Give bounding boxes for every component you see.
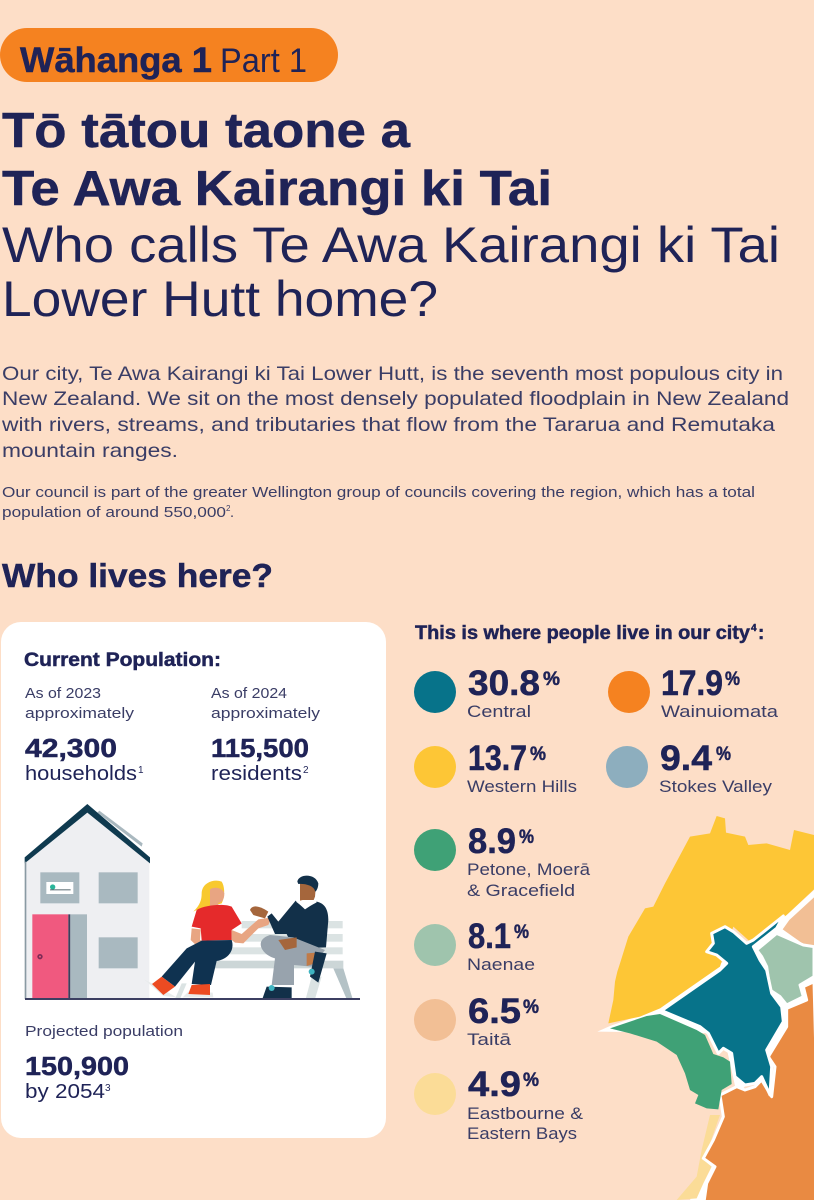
legend: Taitā: 6.5: [468, 992, 521, 1031]
legend: Petone, Moerā and Gracefield: Petone, Moerā: [467, 860, 591, 879]
stat: residents: [211, 686, 321, 785]
map area: Petone, Moerā and Gracefield: [610, 1014, 732, 1109]
stat: projected population: 150,900: [25, 1051, 129, 1081]
title: Te Awa Kairangi ki Tai: [2, 162, 552, 216]
legend: Taitā: [414, 992, 539, 1049]
legend: Western Hills: Western Hills: [467, 777, 577, 796]
intro paragraph: mountain ranges.: [2, 440, 178, 462]
legend: Eastbourne and Eastern Bays: Eastern Bays: [467, 1124, 577, 1143]
council paragraph: [2, 485, 755, 521]
council paragraph: population of around 550,000: [2, 505, 226, 521]
heading: current population: Current Population:: [24, 650, 221, 671]
legend: Central: Central: [467, 702, 531, 721]
stat: households: households: [25, 763, 137, 785]
icon: man in navy jumper: [250, 876, 328, 999]
legend: Naenae: 8.1: [468, 917, 511, 956]
legend: Stokes Valley: %: [716, 744, 731, 765]
legend: Eastbourne and Eastern Bays: %: [523, 1070, 539, 1091]
legend: Central: [414, 664, 560, 721]
map area: Central: [662, 916, 783, 1095]
stat: residents: 115,500: [211, 733, 309, 763]
icon: woman in red shirt: [144, 881, 272, 997]
title: [2, 104, 780, 327]
legend: Petone, Moerā and Gracefield: [414, 822, 591, 900]
legend: Western Hills: 13.7: [468, 739, 527, 778]
legend: Stokes Valley: 9.4: [660, 739, 713, 778]
legend: Eastbourne and Eastern Bays: [414, 1065, 584, 1143]
stat: residents: residents: [211, 763, 302, 785]
stat: residents: 2: [303, 765, 309, 776]
illustration: house and two people on a bench: [25, 804, 360, 1000]
legend: Eastbourne and Eastern Bays: 4.9: [468, 1065, 521, 1104]
map area: Western Hills: [608, 816, 814, 1023]
stat: projected population: by 2054: [25, 1081, 105, 1103]
legend: Stokes Valley: [606, 739, 773, 796]
stat: households: 42,300: [25, 733, 117, 763]
intro paragraph: with rivers, streams, and tributaries that flow from the Tararua and Remutaka: [1, 414, 775, 436]
legend: Central: 30.8: [468, 664, 540, 703]
legend: Petone, Moerā and Gracefield: 8.9: [468, 822, 516, 861]
legend: Petone, Moerā and Gracefield: & Gracefield: [467, 881, 575, 900]
map area: Eastbourne and Eastern Bays: [677, 1115, 720, 1200]
map area: Wainuiomata: [703, 982, 814, 1200]
icon: house: [25, 804, 150, 999]
map of Lower Hutt suburbs: [597, 816, 814, 1200]
heading: where people live: :: [758, 623, 764, 644]
map area: Taitā: [783, 897, 814, 946]
panel: population card: [1, 622, 386, 1138]
stat: residents: As of 2024: [211, 686, 287, 702]
stat: households: 1: [138, 765, 144, 776]
intro paragraph: [1, 363, 789, 462]
stat: households: As of 2023: [25, 686, 101, 702]
stat: projected population: [25, 1023, 183, 1103]
legend: Wainuiomata: %: [725, 669, 740, 690]
stat: projected population: Projected population: [25, 1023, 183, 1040]
legend: Taitā: %: [523, 997, 539, 1018]
stat: residents: approximately: [211, 706, 321, 722]
section tag pill: Part 1: [220, 42, 307, 80]
heading: who lives here: Who lives here?: [2, 557, 273, 594]
legend: Eastbourne and Eastern Bays: Eastbourne &: [467, 1104, 584, 1123]
title: Lower Hutt home?: [2, 271, 438, 327]
section tag pill: [0, 28, 338, 82]
map area: Naenae: [757, 933, 814, 1005]
intro paragraph: New Zealand. We sit on the most densely populated floodplain in New Zealand: [2, 388, 789, 410]
title: Who calls Te Awa Kairangi ki Tai: [2, 217, 780, 273]
council paragraph: 2: [226, 504, 231, 513]
intro paragraph: Our city, Te Awa Kairangi ki Tai Lower Hutt, is the seventh most populous city in: [2, 363, 783, 385]
legend: Naenae: [414, 917, 535, 974]
heading: where people live: 4: [751, 623, 757, 634]
section tag pill: Wāhanga 1: [20, 41, 212, 80]
legend: Naenae: Naenae: [467, 955, 535, 974]
stat: households: approximately: [25, 706, 135, 722]
legend: Naenae: %: [514, 922, 529, 943]
legend: Wainuiomata: Wainuiomata: [661, 702, 779, 721]
legend: Taitā: Taitā: [467, 1030, 512, 1049]
legend: Wainuiomata: 17.9: [661, 664, 723, 703]
icon: bench: [175, 921, 353, 999]
legend: Western Hills: %: [530, 744, 546, 765]
legend: Petone, Moerā and Gracefield: %: [519, 827, 534, 848]
council paragraph: .: [230, 505, 234, 521]
legend: Wainuiomata: [608, 664, 779, 721]
legend: Stokes Valley: Stokes Valley: [659, 777, 773, 796]
legend: Central: %: [543, 669, 560, 690]
legend: Western Hills: [414, 739, 577, 796]
stat: projected population: 3: [105, 1083, 111, 1094]
council paragraph: Our council is part of the greater Wellington group of councils covering the region, which has a total: [2, 485, 755, 501]
heading: where people live: This is where people live in our city: [415, 623, 750, 644]
stat: households: [25, 686, 144, 785]
title: Tō tātou taone a: [2, 104, 411, 158]
